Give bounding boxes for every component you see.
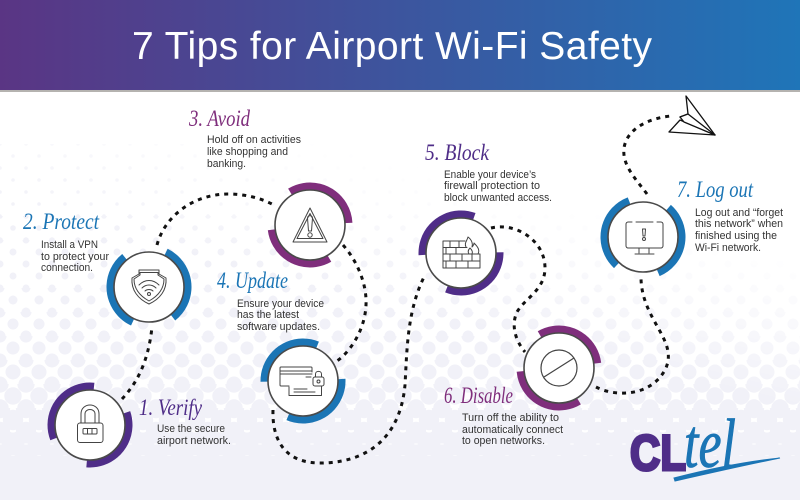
text: disable description: automatically connect — [462, 424, 563, 436]
text: disable description: to open networks. — [462, 435, 545, 447]
text: avoid description: like shopping and — [207, 146, 288, 158]
heading: 6. Disable: 6. Disable — [444, 383, 513, 408]
text: log out description: Wi-Fi network. — [695, 242, 761, 254]
icon: prohibited sign — [541, 350, 577, 386]
text: log out description: finished using the — [695, 230, 777, 242]
icon: firewall — [443, 237, 480, 268]
heading: 1. Verify: 1. Verify — [139, 395, 203, 420]
step 2: protect — [23, 209, 200, 338]
text: protect description: Install a VPN — [41, 239, 98, 251]
text: verify description: Use the secure — [157, 423, 225, 435]
step 1: verify — [40, 375, 231, 475]
logo: CLtel: tel — [684, 406, 736, 483]
text: verify description: airport network. — [157, 435, 231, 447]
text: block description: Enable your device’s — [444, 169, 536, 181]
step 4: update — [217, 268, 343, 421]
text: avoid description: banking. — [207, 158, 246, 170]
logo: CLtel — [630, 406, 780, 483]
title: 7 Tips for Airport Wi-Fi Safety — [132, 25, 652, 68]
text: update description: has the latest — [237, 309, 299, 321]
text: protect description: connection. — [41, 262, 93, 274]
icon: warning triangle — [293, 208, 327, 242]
icon: padlock — [78, 405, 103, 442]
icon: monitor with alert — [626, 222, 663, 254]
text: block description: firewall protection to — [444, 180, 540, 192]
logo: CLtel: CL — [630, 425, 686, 481]
background halftone dots — [0, 144, 800, 500]
text: avoid description — [207, 134, 301, 170]
text: protect description: to protect your — [41, 251, 109, 263]
icon: cards with lock — [280, 367, 324, 396]
icon: paper airplane — [669, 96, 715, 135]
text: update description: Ensure your device — [237, 298, 324, 310]
heading: 7. Log out: 7. Log out — [677, 177, 753, 202]
text: block description — [444, 169, 552, 204]
heading: 2. Protect: 2. Protect — [23, 209, 100, 234]
text: log out description: Log out and “forget — [695, 207, 783, 219]
dotted route line — [122, 116, 671, 463]
text: log out description — [695, 207, 783, 254]
text: update description: software updates. — [237, 321, 320, 333]
text: disable description: Turn off the ability to — [462, 412, 559, 424]
header banner — [0, 0, 800, 92]
text: verify description — [157, 423, 231, 447]
text: avoid description: Hold off on activities — [207, 134, 301, 146]
step 5: block — [421, 140, 552, 293]
step 7: log out — [589, 177, 783, 291]
text: block description: block unwanted access. — [444, 192, 552, 204]
text: update description — [237, 298, 324, 333]
heading: 4. Update: 4. Update — [217, 268, 288, 293]
step 3: avoid — [188, 106, 363, 278]
heading: 3. Avoid: 3. Avoid — [188, 106, 250, 131]
icon: shield with wi-fi — [132, 270, 166, 304]
text: protect description — [41, 239, 109, 274]
text: log out description: this network” when — [695, 218, 783, 230]
text: disable description — [462, 412, 563, 447]
step 6: disable — [444, 315, 612, 447]
heading: 5. Block: 5. Block — [425, 140, 490, 165]
